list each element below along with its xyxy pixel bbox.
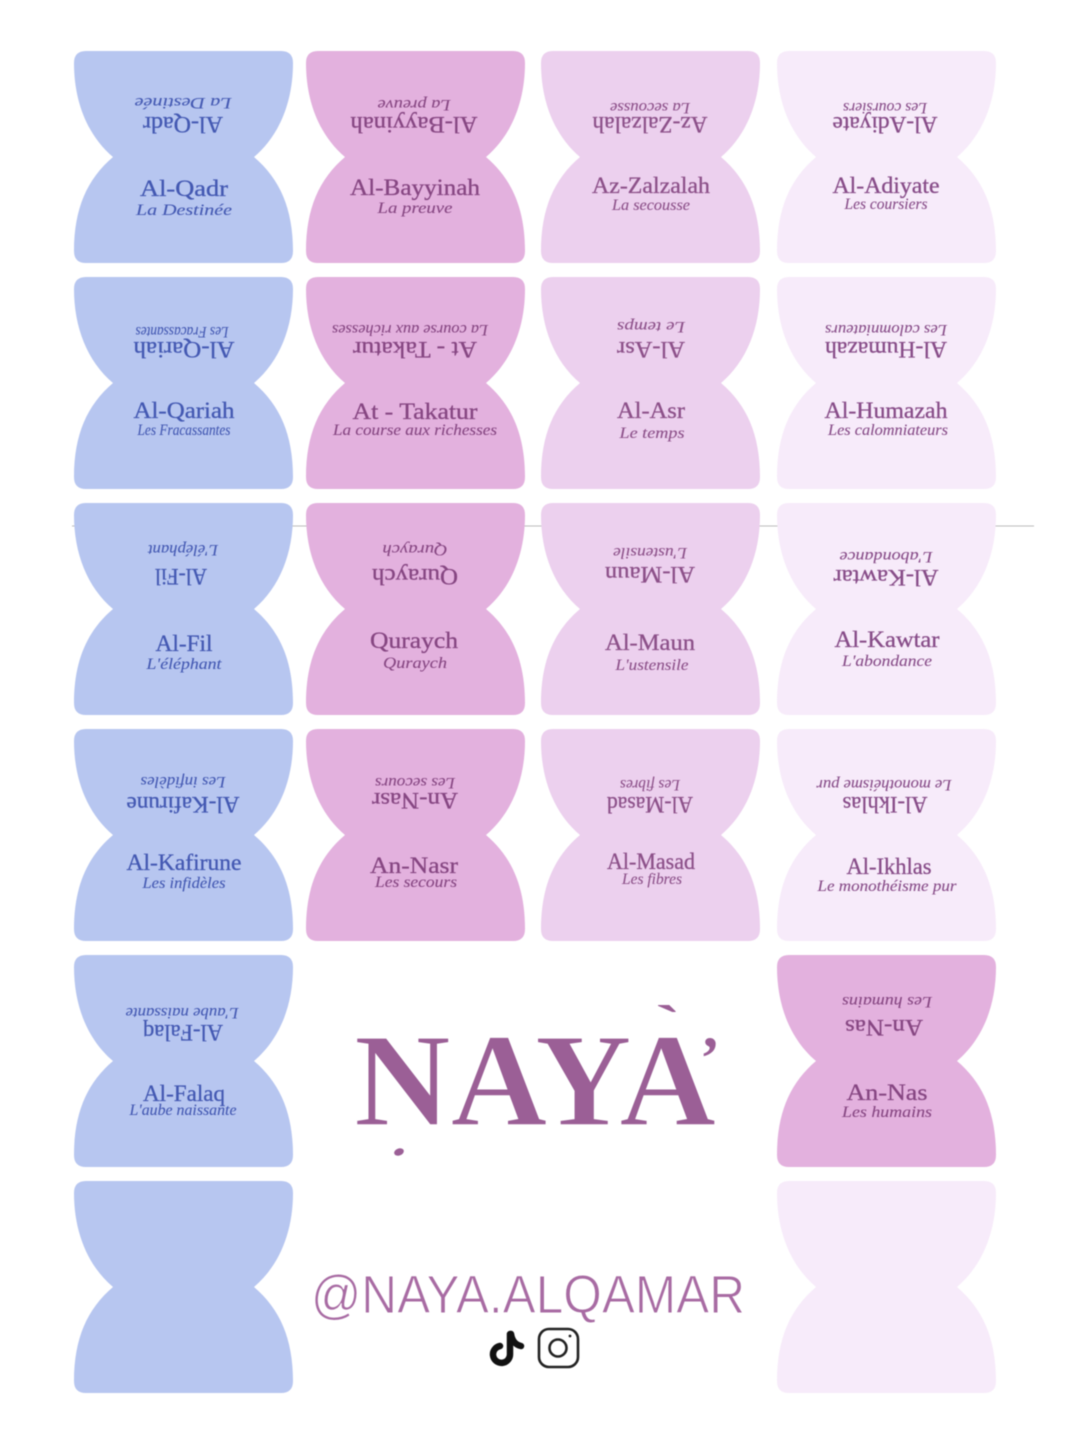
card: Al-Ikhlas: Le monothéisme pur [816,776,953,793]
card: Al-Adiyate [777,51,996,263]
card: An-Nas: An-Nas [845,1015,923,1040]
card: An-Nasr [306,729,525,941]
card: Al-Masad [541,729,760,941]
card: Al-Kawtar: L'abondance [840,548,934,565]
blank card: bottom right [777,1181,996,1393]
icon: TikTok [493,1334,521,1363]
card: Al-Fil: Al-Fil [156,631,212,656]
blank card: bottom left [74,1181,293,1393]
card: Al-Humazah [777,277,996,489]
card: Al-Kawtar: L'abondance [841,653,932,670]
card: Al-Kafirune [74,729,293,941]
card: An-Nas [777,955,996,1167]
card: Al-Asr: Al-Asr [617,398,685,423]
icon: Instagram [539,1329,578,1367]
card: Al-Humazah: Les calomniateurs [827,422,948,439]
card: Al-Kafirune: Al-Kafirune [126,792,240,817]
card: An-Nas: Les humains [842,993,933,1010]
card: Al-Asr: Al-Asr [617,337,685,362]
card: Al-Maun: Al-Maun [604,562,695,587]
card: Al-Kawtar: Al-Kawtar [834,627,940,652]
card: Al-Humazah: Al-Humazah [824,398,948,423]
handle: @NAYA.ALQAMAR: @NAYA.ALQAMAR [311,1265,745,1325]
card: Al-Adiyate: Al-Adiyate [832,112,938,137]
card: An-Nas: Les humains [841,1104,932,1121]
card: Al-Qadr: Al-Qadr [140,176,228,201]
card: Al-Maun [541,503,760,715]
card: At-Takatur: La course aux richesses [332,321,489,338]
logo: NAYÀ’: ’ [700,1025,720,1091]
card: Az-Zalzalah [541,51,760,263]
card: Al-Qariah: Al-Qariah [134,398,235,423]
card: Al-Falaq [74,955,293,1167]
card: Al-Qariah: Les Fracassantes [136,323,229,340]
card: Al-Falaq: Al-Falaq [143,1020,223,1045]
card: An-Nasr: An-Nasr [372,788,458,813]
card: Al-Adiyate: Les coursiers [843,99,928,116]
card: Al-Qariah: Al-Qariah [133,337,234,362]
card: An-Nasr: An-Nasr [370,853,458,878]
card: Al-Humazah: Al-Humazah [824,337,947,362]
card: At-Takatur: At - Takatur [352,399,478,424]
card: Al-Fil: L'éléphant [147,541,219,558]
card: Al-Maun: L'ustensile [614,657,688,674]
card: Al-Maun: Al-Maun [605,630,696,655]
card: Al-Bayyinah: Al-Bayyinah [350,175,481,200]
card: Al-Qadr: La Destinée [135,202,232,219]
card: At-Takatur: At - Takatur [353,337,477,362]
card: Al-Bayyinah [306,51,525,263]
card: Al-Qadr [74,51,293,263]
card: Quraych [306,503,525,715]
card: At-Takatur: La course aux richesses [332,422,497,439]
card: Quraych: Quraych [370,628,459,653]
card: Al-Ikhlas: Al-Ikhlas [846,854,932,879]
card: Al-Adiyate: Les coursiers [844,196,928,213]
card: Quraych: Quraych [371,564,458,589]
card: Al-Asr [541,277,760,489]
card: An-Nas: An-Nas [846,1080,928,1105]
card: Al-Masad: Les fibres [621,871,682,888]
card: Al-Falaq: L'aube naissante [126,1004,240,1021]
card: At-Takatur [306,277,525,489]
card: Al-Adiyate: Al-Adiyate [832,173,940,198]
card: Al-Fil: Al-Fil [155,564,207,589]
card: Al-Humazah: Les calomniateurs [825,321,948,338]
card: Al-Kafirune: Les infidèles [140,773,227,790]
card: Al-Kawtar: Al-Kawtar [833,565,938,590]
card: An-Nasr: Les secours [375,774,456,791]
logo: NAYÀ’: NAYA [354,1006,716,1154]
logo: NAYÀ’: ` [655,996,681,1049]
card: Az-Zalzalah: Az-Zalzalah [592,173,711,198]
card: Quraych: Quraych [383,655,447,672]
card: Al-Falaq: L'aube naissante [129,1102,236,1119]
card: An-Nasr: Les secours [374,874,457,891]
card: Al-Masad: Al-Masad [607,792,693,817]
card: Al-Asr: Le temps [618,425,684,442]
card: Al-Qadr: Al-Qadr [143,112,223,137]
card: Al-Qariah: Les Fracassantes [137,422,230,439]
card: Al-Bayyinah: La preuve [378,96,452,113]
card: Al-Maun: L'ustensile [613,544,688,561]
card: Al-Kawtar [777,503,996,715]
card: Al-Kafirune: Les infidèles [141,875,226,892]
card: Al-Bayyinah: Al-Bayyinah [350,112,478,137]
card: Al-Ikhlas: Al-Ikhlas [842,792,928,817]
card: Al-Fil [74,503,293,715]
card: Al-Ikhlas [777,729,996,941]
card: Al-Qadr: La Destinée [134,94,233,111]
card: Az-Zalzalah: La secousse [611,197,690,214]
card: Al-Asr: Le temps [617,318,686,335]
card: Az-Zalzalah: La secousse [610,99,691,116]
card: Al-Qariah [74,277,293,489]
card: Al-Bayyinah: La preuve [376,200,452,217]
card: Al-Fil: L'éléphant [145,656,222,673]
card: Al-Masad: Les fibres [620,776,681,793]
card: Al-Falaq: Al-Falaq [143,1081,225,1106]
card: Al-Masad: Al-Masad [607,849,695,874]
card: Az-Zalzalah: Az-Zalzalah [592,112,708,137]
card: Al-Ikhlas: Le monothéisme pur [816,878,957,895]
card: Al-Kafirune: Al-Kafirune [126,850,242,875]
card: Quraych: Quraych [382,541,448,558]
